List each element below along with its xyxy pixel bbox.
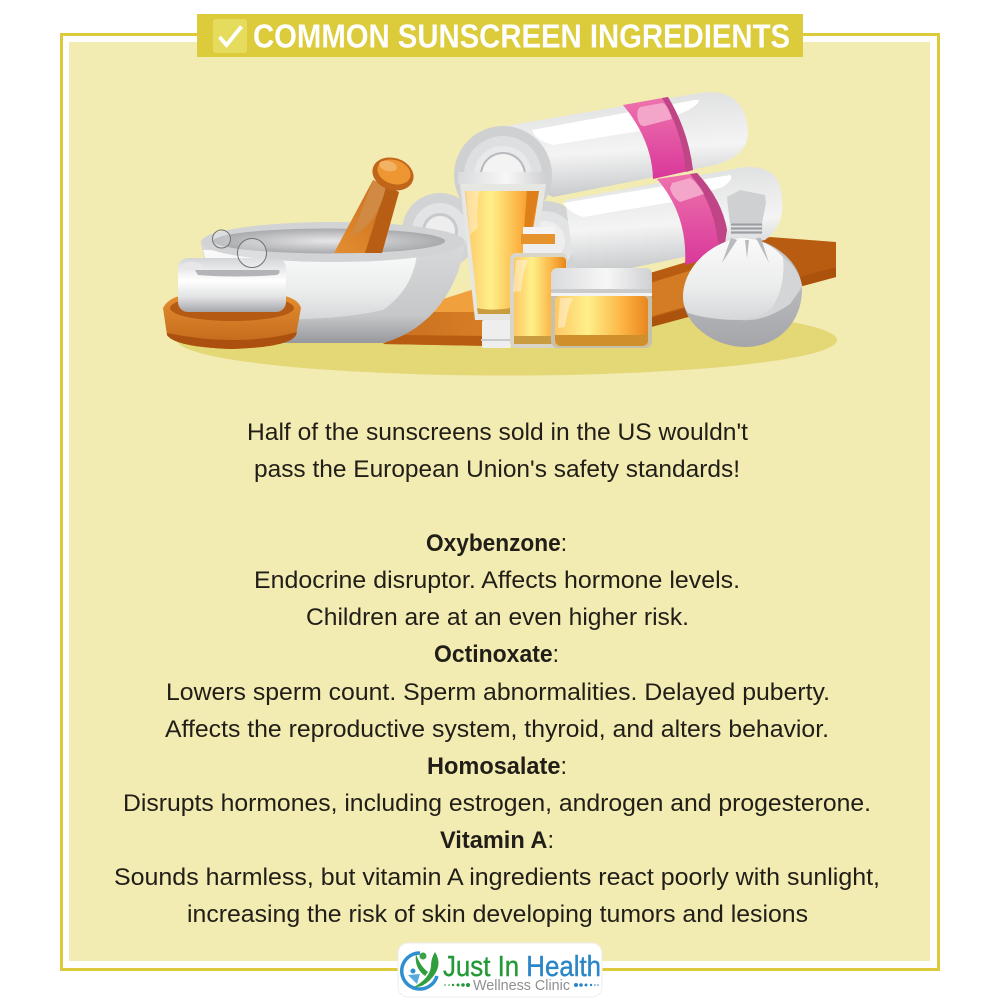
mortar bowl <box>201 222 465 343</box>
rolled towel: upper cap spiral <box>454 126 552 224</box>
intro statement: Half of the sunscreens sold in the US wouldn't <box>247 419 748 446</box>
ingredient: vitamin A: Sounds harmless, but vitamin A ingredients react poorly with sunlight, <box>114 864 880 891</box>
ingredient: oxybenzone <box>254 530 740 631</box>
ingredient: vitamin A <box>114 827 880 928</box>
ingredient: oxybenzone: Children are at an even higher risk. <box>306 604 689 631</box>
intro statement: pass the European Union's safety standards! <box>254 456 740 483</box>
ingredient: vitamin A: increasing the risk of skin developing tumors and lesions <box>187 901 808 928</box>
rolled towel: upper <box>503 92 748 197</box>
ingredient: octinoxate <box>165 641 830 743</box>
ingredient: oxybenzone: Endocrine disruptor. Affects hormone levels. <box>254 567 740 594</box>
logo dots <box>444 983 599 987</box>
ingredient: homosalate: Disrupts hormones, including estrogen, androgen and progesterone. <box>123 790 871 817</box>
icon: check box <box>213 19 247 53</box>
rolled towel: far left cap <box>402 193 478 269</box>
ground shadow <box>177 304 837 376</box>
logo tagline: Wellness Clinic <box>473 978 570 994</box>
pink band <box>657 173 727 265</box>
ingredient: homosalate: Homosalate: <box>427 753 567 780</box>
ingredient: octinoxate: Affects the reproductive system, thyroid, and alters behavior. <box>165 716 829 743</box>
bag <box>683 190 802 347</box>
illustration: mortar, towels and sunscreen products <box>163 92 837 375</box>
intro statement <box>247 419 748 483</box>
pestle <box>334 152 418 253</box>
ingredient: oxybenzone: Oxybenzone: <box>426 530 567 557</box>
ingredient: octinoxate: Lowers sperm count. Sperm abnormalities. Delayed puberty. <box>166 679 830 706</box>
pink band <box>623 97 693 179</box>
logo wordmark: Just In Health <box>443 951 601 983</box>
icon: logo swirl figure <box>402 952 439 989</box>
rolled towel: lower <box>505 167 782 281</box>
soap bar <box>178 258 286 312</box>
ingredient: vitamin A: Vitamin A: <box>440 827 554 854</box>
soap dish <box>163 295 301 349</box>
soap bubbles <box>212 230 266 268</box>
ingredient: homosalate <box>123 753 871 817</box>
title banner <box>197 14 803 57</box>
title text: COMMON SUNSCREEN INGREDIENTS <box>253 18 790 54</box>
body text <box>114 419 880 928</box>
sunscreen tube <box>458 172 546 348</box>
ingredient: octinoxate: Octinoxate: <box>434 641 559 668</box>
logo: Just In Health Wellness Clinic <box>398 943 602 997</box>
small bottle <box>510 227 567 348</box>
wooden board <box>383 237 836 346</box>
jar <box>551 268 652 348</box>
